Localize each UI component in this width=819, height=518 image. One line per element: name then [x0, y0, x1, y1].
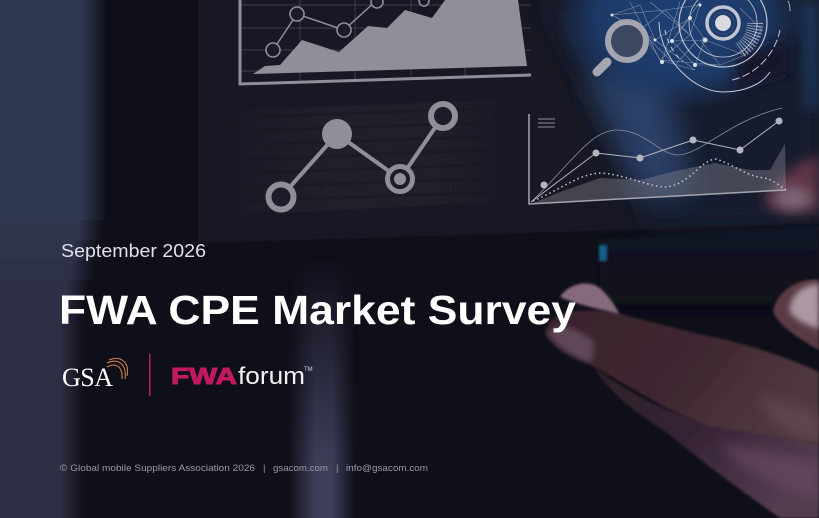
- chart: barcode panel with four nodes: [266, 101, 458, 212]
- chart: line chart with area and dotted line: [529, 108, 786, 204]
- logo: FWAforum: [171, 363, 313, 390]
- footer: info@gsacom.com: [346, 463, 428, 474]
- logo: FWAforum: forum: [238, 363, 305, 390]
- icon: magnifier: [597, 22, 646, 72]
- divider between logos: [149, 354, 151, 396]
- footer: [60, 463, 428, 474]
- title: FWA CPE Market Survey: [59, 287, 577, 333]
- logo: FWAforum: TM: [304, 367, 313, 373]
- date: September 2026: [61, 240, 206, 261]
- logo: FWAforum: FWA: [171, 363, 237, 389]
- graphic: network globe and target rings: [610, 0, 790, 92]
- footer: © Global mobile Suppliers Association 2026: [60, 463, 255, 474]
- footer: |: [263, 463, 265, 474]
- logo: GSA: GSA: [62, 363, 113, 392]
- footer: gsacom.com: [273, 463, 328, 474]
- logo: GSA: [62, 358, 128, 392]
- photo: hand and fingers: [545, 155, 819, 518]
- chart: mountain area with line: [240, 0, 531, 84]
- footer: |: [336, 463, 338, 474]
